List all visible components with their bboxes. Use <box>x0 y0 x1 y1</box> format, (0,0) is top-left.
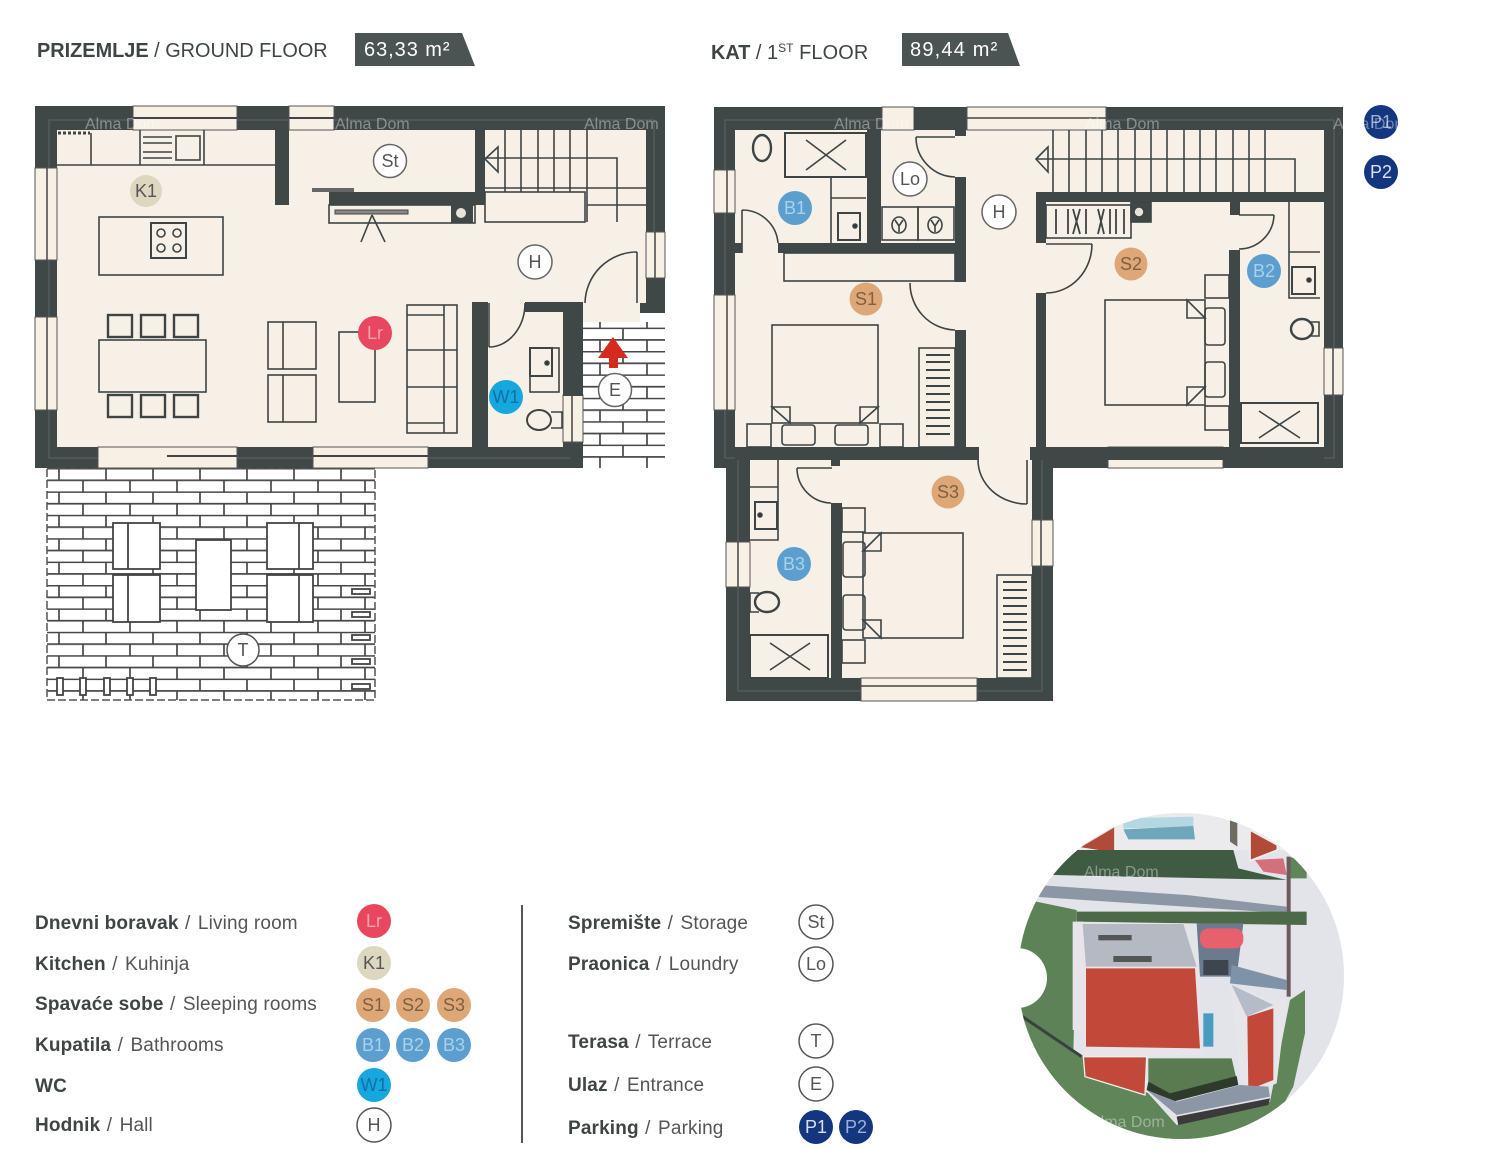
bathroom B3 fixtures <box>750 460 832 678</box>
legend: room types right column: P2 <box>845 1117 867 1137</box>
legend: room types left column <box>35 904 471 1142</box>
room markers: first floor: B1 <box>784 198 806 218</box>
dining table <box>99 315 206 417</box>
bedroom S3 furniture <box>842 460 1032 678</box>
media unit and cabinet <box>329 192 585 242</box>
parking markers: P1 <box>1370 112 1392 132</box>
interior floor <box>735 130 1324 678</box>
watermarks: first floor: Alma Dom <box>1333 116 1408 133</box>
room markers: first floor: S1 <box>855 289 877 309</box>
legend: room types right column: Lo <box>806 954 826 974</box>
laundry room fixtures <box>882 137 955 240</box>
room markers: ground floor: St <box>381 151 399 171</box>
legend: room types right column: P1 <box>805 1117 827 1137</box>
room markers: ground floor <box>130 144 632 666</box>
neighbouring plots <box>1053 810 1307 880</box>
interior walls <box>275 130 583 448</box>
stairs <box>485 130 646 222</box>
title: first floor <box>711 33 1020 66</box>
main house <box>1073 922 1203 1055</box>
legend: room types left column: B1 <box>362 1035 384 1055</box>
legend: room types left column: Hodnik / Hall <box>35 1115 153 1136</box>
bedroom S1 furniture <box>747 253 955 447</box>
kitchen island and hob <box>99 217 223 275</box>
title: ground floor <box>37 33 475 66</box>
watermarks: first floor: Alma Dom <box>1085 116 1160 133</box>
title: first floor: KAT / 1 <box>711 42 778 64</box>
legend: room types left column: S1 <box>362 995 384 1015</box>
title: first floor: 89,44 m² <box>910 39 999 61</box>
aerial watermarks: Alma Dom <box>1090 1114 1165 1131</box>
legend: room types right column: Parking / Parking <box>568 1118 724 1139</box>
room markers: ground floor: E <box>609 380 621 400</box>
room markers: first floor: Lo <box>900 169 920 189</box>
living room furniture <box>268 305 457 433</box>
room markers: ground floor: T <box>238 640 248 660</box>
exterior walls <box>35 106 665 468</box>
room markers: ground floor: W1 <box>492 387 520 407</box>
hedge and lawn <box>1013 900 1307 1147</box>
room markers: ground floor: H <box>528 252 542 272</box>
title: first floor: FLOOR <box>793 42 868 64</box>
parked car and driveway <box>1197 923 1243 977</box>
room markers: first floor: S3 <box>937 482 959 502</box>
doors <box>489 252 637 347</box>
room markers: first floor: H <box>992 202 1006 222</box>
legend: room types left column: Spavaće sobe / Sleeping rooms <box>35 994 317 1015</box>
legend: room types left column: S2 <box>402 995 424 1015</box>
legend: room types right column: Ulaz / Entrance <box>568 1075 704 1096</box>
room markers: ground floor: K1 <box>135 181 157 201</box>
bedroom S2 furniture <box>1046 202 1229 430</box>
room markers: first floor <box>777 162 1281 581</box>
legend: room types left column: K1 <box>363 953 385 973</box>
aerial cut-out <box>987 948 1047 1008</box>
parking markers: P2 <box>1370 162 1392 182</box>
legend: room types right column: St <box>807 912 825 932</box>
exterior walls <box>714 107 1343 701</box>
watermarks: ground floor: Alma Dom <box>335 116 410 133</box>
legend: room types right column <box>568 905 873 1144</box>
panel: ground floor plan <box>35 106 665 700</box>
legend: room types right column: Praonica / Loundry <box>568 954 739 975</box>
title: ground floor: PRIZEMLJE / GROUND FLOOR <box>37 40 328 62</box>
terrace furniture <box>57 523 370 695</box>
legend: room types left column: B2 <box>402 1035 424 1055</box>
legend divider <box>521 905 523 1143</box>
windows <box>714 107 1343 701</box>
road <box>1030 857 1291 997</box>
title: ground floor: 63,33 m² <box>364 39 451 61</box>
bathroom B1 fixtures <box>742 133 866 253</box>
room markers: ground floor: Lr <box>367 323 383 343</box>
legend: room types left column: Lr <box>366 911 382 931</box>
aerial site view <box>1013 810 1347 1147</box>
room markers: first floor: S2 <box>1120 254 1142 274</box>
legend: room types left column: S3 <box>443 995 465 1015</box>
legend: room types right column: T <box>810 1031 822 1051</box>
interior floor <box>57 130 646 447</box>
wc fixtures <box>527 348 562 430</box>
legend: room types left column: Kupatila / Bathrooms <box>35 1035 224 1056</box>
legend: room types right column: Terasa / Terrace <box>568 1032 712 1053</box>
room markers: first floor: B3 <box>783 554 805 574</box>
title: first floor: ST <box>778 41 794 55</box>
legend: room types right column: Spremište / Storage <box>568 913 748 934</box>
panel: first floor plan <box>714 105 1408 701</box>
stairs <box>1036 130 1295 192</box>
terrace paving <box>47 468 375 700</box>
aerial watermarks <box>1084 864 1165 1131</box>
legend: room types right column: E <box>810 1074 822 1094</box>
watermarks: ground floor: Alma Dom <box>85 116 160 133</box>
parking markers <box>1364 105 1398 189</box>
interior walls <box>733 107 1324 679</box>
legend: room types left column: Dnevni boravak / Living room <box>35 913 298 934</box>
side wing <box>1203 965 1287 1097</box>
kitchen counter <box>57 130 275 165</box>
bathroom B2 fixtures <box>1239 202 1320 443</box>
entrance arrow <box>598 337 628 368</box>
lower roof and garden <box>1083 1057 1270 1125</box>
legend: room types left column: H <box>368 1115 380 1135</box>
watermarks: first floor: Alma Dom <box>834 116 909 133</box>
watermarks: ground floor: Alma Dom <box>584 116 659 133</box>
entrance paving <box>581 322 665 468</box>
legend: room types left column: B3 <box>443 1035 465 1055</box>
aerial watermarks: Alma Dom <box>1084 864 1159 881</box>
legend: room types left column: W1 <box>360 1075 388 1095</box>
windows <box>35 106 665 468</box>
watermarks: ground floor <box>85 116 659 133</box>
room markers: first floor: B2 <box>1253 261 1275 281</box>
legend: room types left column: WC <box>35 1076 67 1097</box>
watermarks: first floor <box>834 116 1408 133</box>
legend: room types left column: Kitchen / Kuhinja <box>35 954 190 975</box>
